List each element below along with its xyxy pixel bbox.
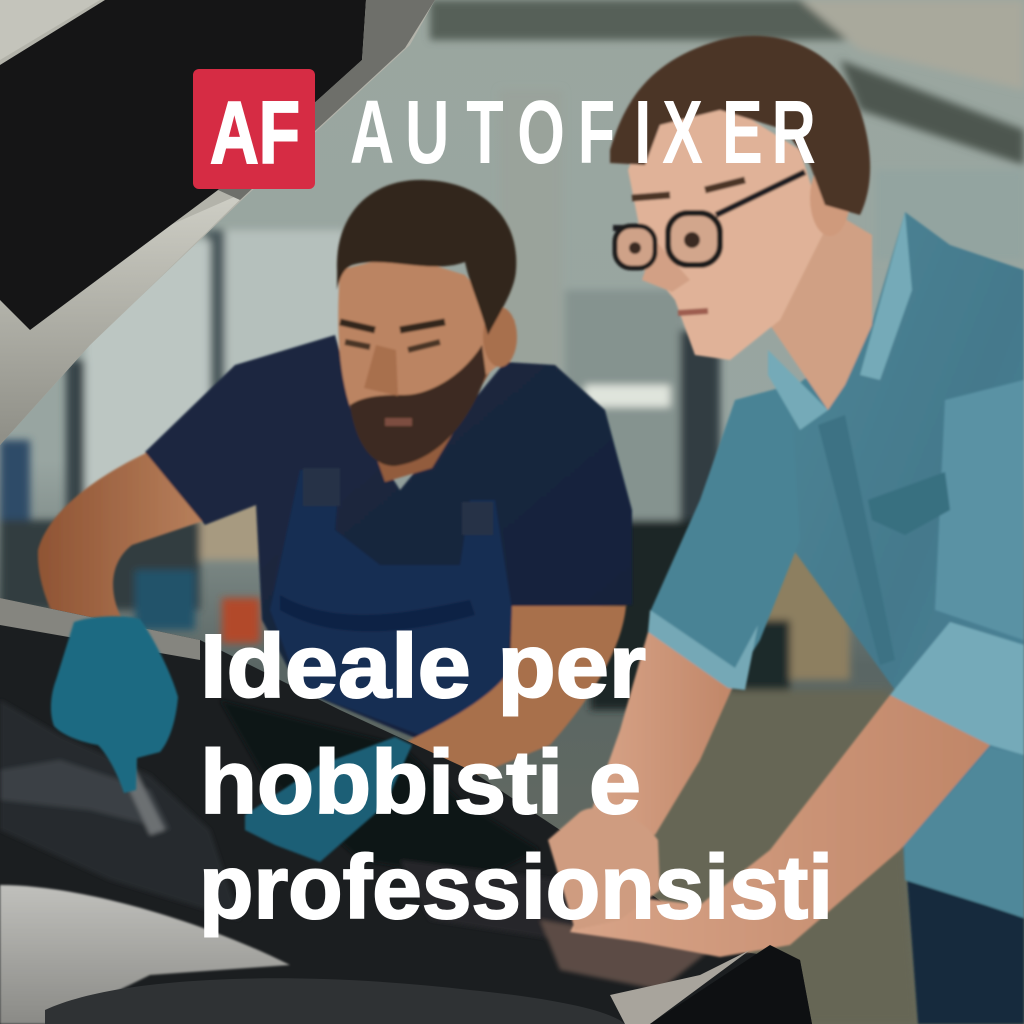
face (628, 100, 825, 360)
glasses (613, 172, 805, 228)
headline line 1: Ideale per (200, 617, 646, 717)
beard (350, 345, 486, 466)
man in dark polo (mechanic) (38, 180, 632, 790)
car front bumper and headlight (0, 885, 812, 1024)
denim shirt body (745, 212, 1024, 918)
overall apron (270, 470, 512, 735)
logo badge (193, 69, 315, 189)
polo shirt (145, 335, 632, 740)
lower shirt panel (905, 748, 1024, 918)
hand on car (548, 808, 660, 930)
face (338, 255, 515, 450)
right forearm (570, 695, 990, 957)
collar (768, 212, 912, 430)
headline (199, 617, 833, 938)
shoulder and right sleeve (935, 380, 1024, 640)
placket and pocket (818, 415, 895, 665)
brand name: AUTOFIXER (350, 82, 816, 183)
headline line 3: professionsisti (199, 838, 833, 938)
hair (610, 36, 870, 215)
left arm (38, 452, 206, 650)
eyes and brows (340, 322, 445, 330)
left sleeve (650, 385, 800, 680)
man in denim shirt (engineer) (548, 36, 1024, 1024)
trousers (905, 850, 1024, 1024)
logo badge: AF (210, 83, 300, 182)
rolled cuff right (890, 622, 1024, 755)
open car hood (0, 0, 435, 445)
headline line 2: hobbisti e (200, 733, 641, 833)
neck (770, 210, 872, 410)
left forearm (590, 632, 735, 835)
engine bay (0, 598, 812, 1024)
mechanic's gloved hands (51, 616, 412, 862)
neck (370, 340, 490, 482)
mouth and brows (678, 311, 708, 313)
right forearm (400, 606, 626, 790)
hair (337, 180, 516, 335)
